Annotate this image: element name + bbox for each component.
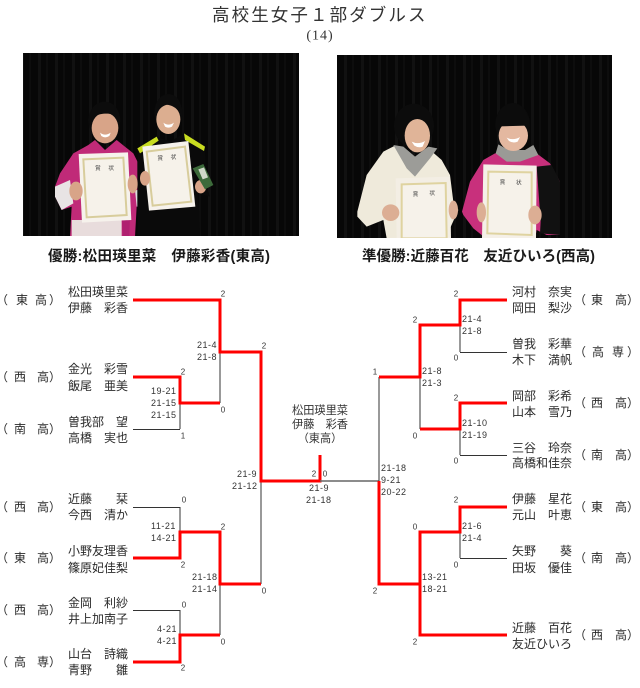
entry: 近藤・今西: 近藤 栞 bbox=[68, 492, 128, 506]
set scores: 18-21 bbox=[422, 584, 448, 594]
games won: 2 bbox=[181, 368, 186, 376]
final winner names: 伊藤 彩香 bbox=[292, 418, 348, 431]
set scores: 21-3 bbox=[422, 378, 442, 388]
set scores: 4-21 bbox=[157, 636, 177, 646]
games won: 2 bbox=[221, 290, 226, 298]
set scores: 21-18 bbox=[192, 572, 218, 582]
photo: winners: 賞 bbox=[95, 163, 101, 172]
games won: 0 bbox=[182, 600, 187, 610]
games won: 0 bbox=[454, 456, 459, 466]
games won: 2 bbox=[454, 496, 459, 504]
entry: 三谷・高橋: （南高） bbox=[574, 447, 639, 462]
entry: 小野・篠原: 小野友理香 bbox=[68, 544, 128, 558]
entry: 山台・青野: 青野 雛 bbox=[68, 662, 128, 677]
games won: 0 bbox=[454, 354, 459, 362]
entry: 河村・岡田: 岡田 梨沙 bbox=[512, 301, 572, 315]
entry: 河村・岡田: （東高） bbox=[574, 293, 639, 307]
photo: runners-up: 賞 bbox=[413, 189, 419, 198]
set scores: 21-12 bbox=[232, 481, 258, 491]
games won: 1 bbox=[181, 432, 186, 440]
entry: 曽我・木下: （高専） bbox=[574, 345, 639, 359]
set scores: 21-15 bbox=[151, 410, 177, 420]
photo: runners-up: 状 bbox=[429, 188, 435, 197]
entry: 山台・青野: 山台 詩織 bbox=[68, 646, 128, 661]
set scores: 11-21 bbox=[151, 521, 176, 531]
left entries bbox=[0, 285, 128, 677]
final winner names: （東高） bbox=[298, 432, 342, 445]
entry: 金岡・井上 bbox=[0, 595, 128, 626]
games won: 2 bbox=[454, 290, 459, 298]
games won: 0 bbox=[182, 496, 187, 504]
right entries bbox=[512, 285, 639, 651]
set scores: 21-18 bbox=[381, 463, 407, 473]
games won: 2 bbox=[373, 586, 378, 596]
set scores: 21-4 bbox=[462, 533, 482, 543]
photo: winners bbox=[23, 53, 299, 237]
set scores: 14-21 bbox=[151, 533, 177, 543]
set scores: 21-15 bbox=[151, 398, 177, 408]
entry: 近藤・友近: 友近ひいろ bbox=[512, 637, 572, 651]
games won: 0 bbox=[454, 560, 459, 570]
title: 高校生女子１部ダブルス bbox=[212, 5, 428, 25]
set scores: 21-14 bbox=[192, 584, 218, 594]
games won: 0 bbox=[221, 406, 226, 414]
entry: 伊藤・元山 bbox=[512, 492, 639, 522]
set scores: 21-8 bbox=[422, 366, 442, 376]
games won: 2 bbox=[221, 522, 226, 532]
games won: 0 bbox=[262, 586, 267, 596]
entry: 金岡・井上: 井上加南子 bbox=[68, 611, 128, 626]
entry: 近藤・今西: 今西 清か bbox=[68, 507, 128, 522]
photo: runners-up: 状 bbox=[516, 177, 522, 186]
entry: 岡部・山本 bbox=[512, 388, 639, 419]
caption: runners-up: 準優勝:近藤百花 友近ひいろ(西高) bbox=[362, 247, 595, 265]
set scores: 21-9 bbox=[237, 469, 257, 479]
games won: 0 bbox=[323, 470, 328, 478]
games won: 2 bbox=[413, 638, 418, 646]
entry: 近藤・友近 bbox=[512, 621, 639, 651]
set scores: 21-18 bbox=[306, 495, 332, 505]
entry: 松田・伊藤 bbox=[0, 285, 128, 315]
set scores bbox=[151, 314, 488, 646]
games won: 2 bbox=[312, 470, 317, 478]
entry: 金光・飯尾: 金光 彩雪 bbox=[68, 362, 128, 376]
final winner names bbox=[292, 403, 348, 445]
entry: 岡部・山本: 山本 雪乃 bbox=[512, 405, 572, 419]
games won bbox=[181, 290, 459, 672]
caption: winners: 優勝:松田瑛里菜 伊藤彩香(東高) bbox=[48, 247, 270, 265]
entry: 河村・岡田 bbox=[512, 285, 639, 315]
set scores: 21-4 bbox=[462, 314, 482, 324]
entry: 三谷・高橋: 高橋和佳奈 bbox=[512, 456, 572, 470]
set scores: 21-4 bbox=[197, 340, 217, 350]
entry: 岡部・山本: （西高） bbox=[574, 396, 639, 410]
entry: 伊藤・元山: 元山 叶恵 bbox=[512, 508, 572, 522]
entry: 岡部・山本: 岡部 彩希 bbox=[512, 388, 572, 403]
photo: runners-up bbox=[337, 55, 612, 238]
entry: 近藤・友近: 近藤 百花 bbox=[512, 621, 572, 635]
entry: 河村・岡田: 河村 奈実 bbox=[512, 285, 572, 299]
set scores: 13-21 bbox=[422, 572, 448, 582]
set scores: 21-8 bbox=[462, 326, 482, 336]
entry: 曽我・木下: 曽我 彩華 bbox=[512, 336, 572, 351]
entry: 近藤・今西 bbox=[0, 492, 128, 522]
entry: 山台・青野 bbox=[0, 646, 128, 677]
entry: 矢野・田坂: （南高） bbox=[574, 550, 639, 565]
entry: 近藤・友近: （西高） bbox=[574, 628, 639, 642]
entry: 伊藤・元山: 伊藤 星花 bbox=[512, 492, 572, 506]
bracket lines: left side bbox=[133, 300, 320, 662]
set scores: 4-21 bbox=[157, 624, 177, 634]
entry: 三谷・高橋 bbox=[512, 441, 639, 470]
games won: 1 bbox=[373, 368, 378, 376]
entry: 小野・篠原: 篠原妃佳梨 bbox=[68, 561, 128, 575]
set scores: 9-21 bbox=[381, 475, 401, 485]
games won: 2 bbox=[262, 342, 267, 350]
photo: winners: 賞 bbox=[157, 153, 163, 162]
games won: 2 bbox=[181, 664, 186, 672]
entry: 曽我部・高橋: 高橋 実也 bbox=[68, 431, 128, 445]
entry: 松田・伊藤: 松田瑛里菜 bbox=[68, 285, 128, 299]
set scores: 21-8 bbox=[197, 352, 217, 362]
entry: 曽我部・高橋: 曽我部 望 bbox=[68, 414, 128, 429]
set scores: 19-21 bbox=[151, 386, 177, 396]
photo: runners-up: 賞 bbox=[500, 177, 506, 186]
entry: 矢野・田坂: 矢野 葵 bbox=[512, 544, 572, 558]
games won: 2 bbox=[454, 394, 459, 402]
entry: 金岡・井上: 金岡 利紗 bbox=[68, 595, 128, 610]
games won: 2 bbox=[181, 560, 186, 570]
entry: 松田・伊藤: 伊藤 彩香 bbox=[68, 301, 128, 315]
games won: 0 bbox=[221, 638, 226, 646]
entry: 伊藤・元山: （東高） bbox=[574, 500, 639, 514]
entry: 三谷・高橋: 三谷 玲奈 bbox=[512, 441, 572, 455]
photo: winners: 状 bbox=[108, 163, 114, 172]
entry: 曽我・木下: 木下 満帆 bbox=[512, 352, 572, 367]
entry: 金光・飯尾 bbox=[0, 362, 128, 393]
games won: 0 bbox=[413, 522, 418, 532]
games won: 0 bbox=[413, 432, 418, 440]
set scores: 21-9 bbox=[309, 483, 329, 493]
games won: 2 bbox=[413, 316, 418, 324]
set scores: 21-10 bbox=[462, 418, 488, 428]
set scores: 20-22 bbox=[381, 487, 407, 497]
entry: 矢野・田坂 bbox=[512, 544, 639, 575]
subtitle: year: (14) bbox=[306, 28, 334, 44]
bracket lines: right side bbox=[320, 300, 507, 635]
entry: 曽我部・高橋 bbox=[0, 414, 128, 445]
entry: 曽我・木下 bbox=[512, 336, 639, 367]
set scores: 21-19 bbox=[462, 430, 488, 440]
set scores: 21-6 bbox=[462, 521, 482, 531]
entry: 小野・篠原 bbox=[0, 544, 128, 575]
final winner names: 松田瑛里菜 bbox=[292, 403, 348, 417]
photo: winners: 状 bbox=[171, 152, 177, 161]
entry: 金光・飯尾: 飯尾 亜美 bbox=[68, 379, 128, 393]
entry: 矢野・田坂: 田坂 優佳 bbox=[512, 561, 572, 575]
